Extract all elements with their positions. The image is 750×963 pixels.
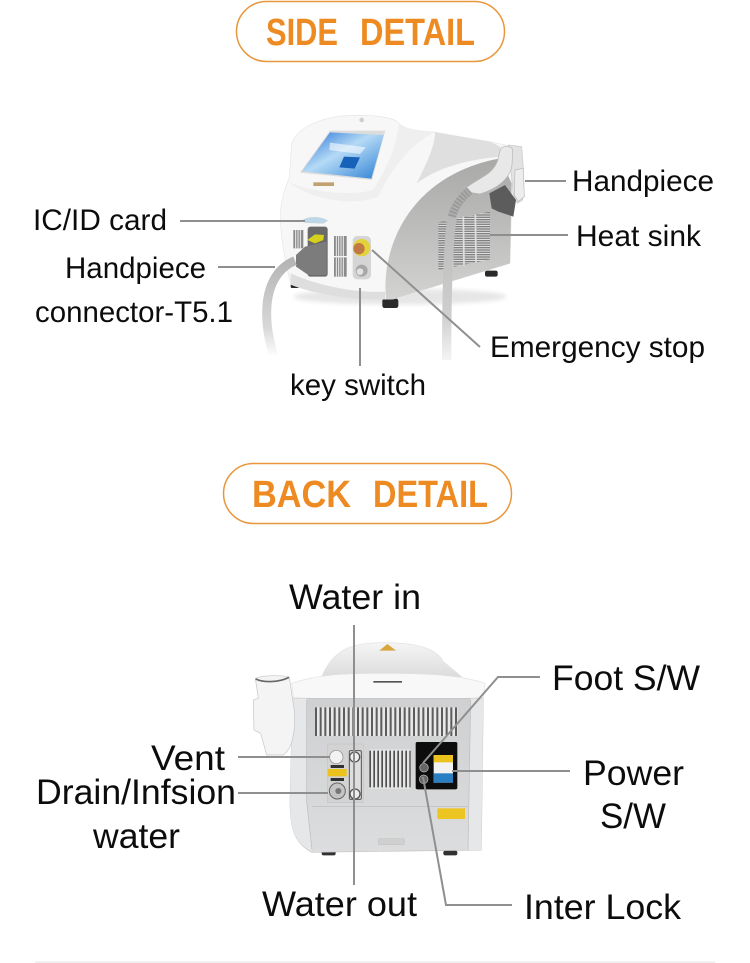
side labels: Emergency stop bbox=[490, 331, 705, 364]
connector body bbox=[296, 242, 327, 275]
back labels: Foot S/W bbox=[552, 658, 700, 698]
breaker bbox=[434, 755, 453, 783]
back view machine illustration bbox=[253, 643, 485, 855]
touch screen bbox=[302, 132, 384, 179]
machine body bbox=[280, 115, 517, 299]
holder clip bbox=[514, 168, 524, 202]
top vent bbox=[315, 707, 458, 736]
heading badge: side detail: SIDE bbox=[266, 12, 338, 54]
rear panel bbox=[290, 698, 483, 852]
head shading bbox=[288, 123, 435, 201]
yellow sticker bbox=[328, 769, 347, 776]
IC card slot bbox=[303, 217, 328, 223]
emergency stop bbox=[353, 239, 370, 256]
vent cap bbox=[330, 750, 343, 764]
side labels: Handpiece bbox=[65, 252, 206, 285]
holder rear bbox=[508, 145, 523, 203]
key switch bbox=[356, 265, 368, 277]
back labels: S/W bbox=[600, 796, 666, 836]
side strips bbox=[290, 698, 483, 852]
vents bbox=[293, 230, 347, 277]
back labels: Water in bbox=[289, 577, 421, 617]
side labels bbox=[33, 165, 714, 402]
side labels: IC/ID card bbox=[33, 204, 167, 237]
callout lines: side bbox=[180, 181, 568, 366]
left cable bbox=[267, 261, 295, 357]
right cable bbox=[447, 215, 453, 360]
back labels: water bbox=[92, 816, 180, 856]
top dome bbox=[322, 643, 462, 677]
machine feet bbox=[291, 271, 498, 308]
back labels: Power bbox=[583, 753, 684, 793]
cable strain relief bbox=[452, 189, 472, 217]
heading badge: side detail: DETAIL bbox=[360, 12, 475, 54]
water fittings bbox=[350, 752, 360, 762]
handpiece top edge bbox=[256, 677, 289, 682]
drain fitting bbox=[329, 783, 345, 799]
yellow connector bbox=[307, 234, 324, 243]
body lower base bbox=[291, 273, 385, 299]
water plate bbox=[327, 744, 363, 803]
back labels: Drain/Infsion bbox=[36, 772, 236, 812]
back labels: Vent bbox=[151, 738, 225, 778]
side labels: Handpiece bbox=[572, 165, 714, 198]
floor shadow bbox=[293, 289, 507, 305]
feet bbox=[322, 851, 457, 855]
shell slot bbox=[373, 681, 402, 683]
connector recess bbox=[308, 227, 328, 277]
gray side panel bbox=[385, 158, 512, 299]
back labels bbox=[36, 577, 700, 927]
back labels: Inter Lock bbox=[524, 887, 681, 927]
heading badge: back detail: DETAIL bbox=[373, 474, 488, 516]
breaker warning label bbox=[434, 755, 453, 762]
screen bezel bbox=[300, 131, 385, 180]
logo bbox=[313, 182, 334, 186]
sockets bbox=[420, 763, 428, 772]
top button bbox=[359, 118, 364, 122]
panel inner frame bbox=[307, 700, 471, 850]
side labels: Heat sink bbox=[576, 220, 702, 253]
screen highlight bbox=[329, 143, 366, 154]
back labels: Water out bbox=[262, 884, 417, 924]
heading badge: back detail bbox=[224, 464, 512, 524]
warning sticker bbox=[437, 808, 465, 819]
side labels: connector-T5.1 bbox=[35, 296, 233, 329]
center vent bbox=[369, 749, 411, 789]
flow meter bbox=[349, 751, 361, 799]
black control panel bbox=[416, 742, 457, 789]
top shell bbox=[292, 673, 485, 699]
control plate bbox=[353, 236, 371, 279]
side labels: key switch bbox=[290, 369, 426, 402]
top shading bbox=[417, 132, 500, 183]
heading badge: back detail: BACK bbox=[252, 474, 351, 516]
side view machine illustration bbox=[267, 115, 524, 360]
handpiece bbox=[253, 676, 295, 755]
label strips bbox=[331, 765, 344, 768]
warning triangle bbox=[379, 644, 396, 651]
screen button bbox=[339, 157, 360, 169]
bottom handle bbox=[378, 839, 404, 845]
holder dark base bbox=[489, 185, 516, 217]
handpiece bbox=[467, 146, 513, 194]
callout lines: back bbox=[238, 625, 570, 905]
heading badge: side detail bbox=[236, 2, 504, 62]
heat sink bbox=[438, 212, 490, 270]
